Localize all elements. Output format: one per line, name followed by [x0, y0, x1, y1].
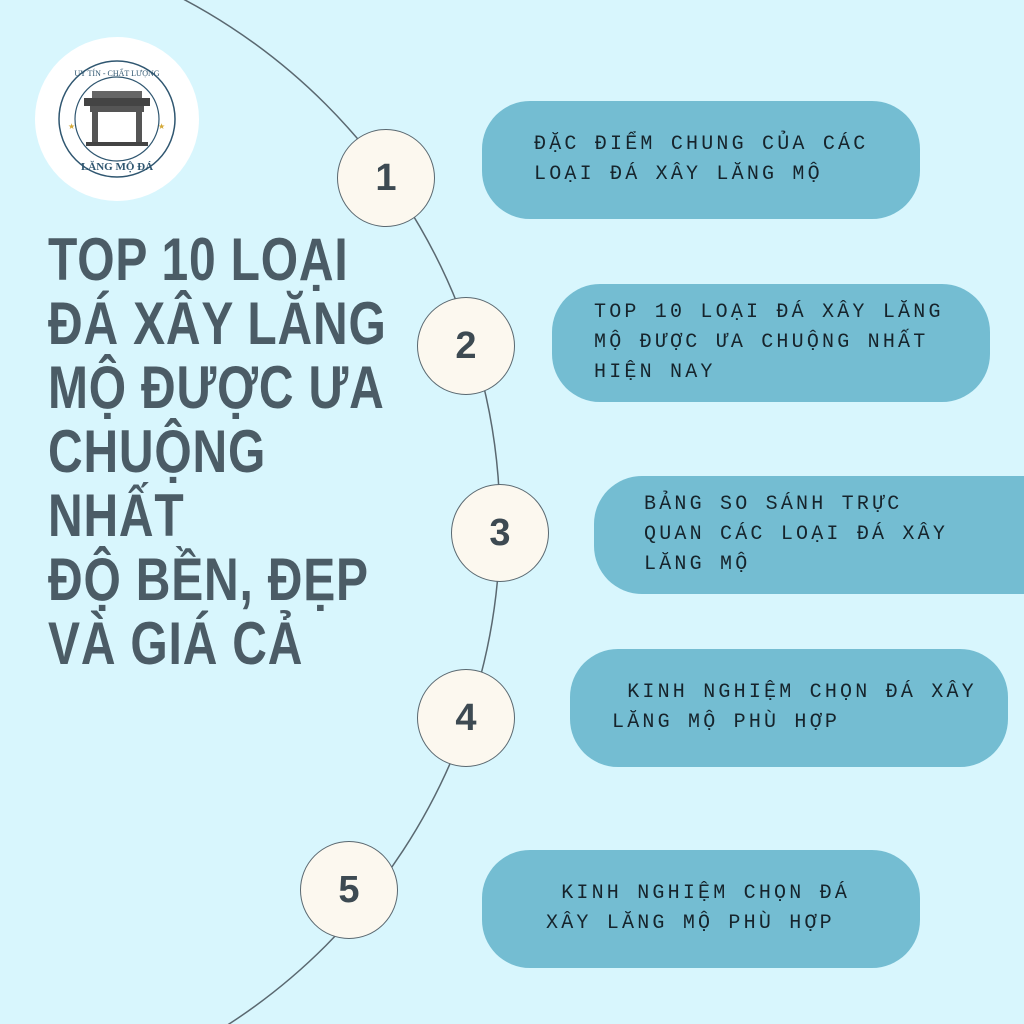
title [48, 226, 387, 677]
step 3 box [594, 476, 1024, 594]
step 4 box: KINH NGHIỆM CHỌN ĐÁ XÂY [627, 681, 977, 704]
title: ĐỘ BỀN, ĐẸP [48, 546, 369, 613]
step 5 box: KINH NGHIỆM CHỌN ĐÁ [561, 882, 850, 905]
step 5 number: 5 [338, 868, 360, 910]
step 1 number: 1 [375, 156, 397, 198]
title: VÀ GIÁ CẢ [48, 610, 303, 677]
step 2 number [417, 297, 515, 395]
step 3 box: QUAN CÁC LOẠI ĐÁ XÂY [644, 523, 948, 546]
step 1 box [482, 101, 920, 219]
step 1 box: ĐẶC ĐIỂM CHUNG CỦA CÁC [534, 133, 868, 156]
title: TOP 10 LOẠI [48, 226, 348, 293]
title: ĐÁ XÂY LĂNG [48, 290, 387, 357]
step 2 box: TOP 10 LOẠI ĐÁ XÂY LĂNG [594, 301, 944, 324]
step 1 box: LOẠI ĐÁ XÂY LĂNG MỘ [534, 163, 823, 186]
logo: ★ [68, 122, 75, 131]
step 4 number: 4 [455, 696, 477, 738]
step 2 box [552, 284, 990, 402]
step 3 number [451, 484, 549, 582]
step 2 number: 2 [455, 324, 477, 366]
step 3 box: LĂNG MỘ [644, 553, 750, 576]
title: NHẤT [48, 482, 185, 549]
logo [35, 37, 199, 201]
step 1 number [337, 129, 435, 227]
step 4 box [570, 649, 1008, 767]
step 3 number: 3 [489, 512, 511, 554]
step 5 box: XÂY LĂNG MỘ PHÙ HỢP [546, 912, 835, 935]
step 2 box: HIỆN NAY [594, 361, 716, 384]
step 4 box: LĂNG MỘ PHÙ HỢP [612, 711, 840, 734]
logo: LĂNG MỘ ĐÁ [81, 160, 153, 173]
logo: ★ [158, 122, 165, 131]
step 5 number [300, 841, 398, 939]
title: MỘ ĐƯỢC ƯA [48, 354, 385, 421]
step 2 box: MỘ ĐƯỢC ƯA CHUỘNG NHẤT [594, 331, 928, 354]
step 5 box [482, 850, 920, 968]
step 3 box: BẢNG SO SÁNH TRỰC [644, 493, 902, 516]
logo: UY TÍN - CHẤT LƯỢNG [74, 68, 160, 78]
title: CHUỘNG [48, 418, 266, 485]
step 4 number [417, 669, 515, 767]
